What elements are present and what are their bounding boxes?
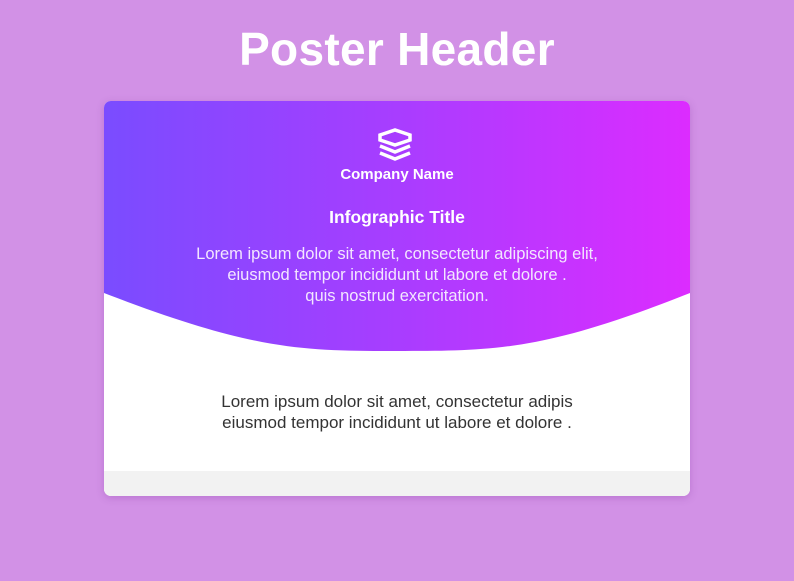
company name: Company Name <box>340 166 454 183</box>
panel: card <box>104 101 690 496</box>
body text <box>221 392 573 432</box>
title: Poster Header <box>239 23 555 75</box>
header text: eiusmod tempor incididunt ut labore et dolore . <box>227 266 567 284</box>
footer strip <box>104 471 690 496</box>
gradient header with curve <box>104 101 690 351</box>
infographic title: Infographic Title <box>329 207 465 227</box>
body text: eiusmod tempor incididunt ut labore et dolore . <box>222 413 572 432</box>
header text: quis nostrud exercitation. <box>305 287 489 305</box>
header text: Lorem ipsum dolor sit amet, consectetur adipiscing elit, <box>196 245 598 263</box>
header text <box>196 245 598 305</box>
body text: Lorem ipsum dolor sit amet, consectetur adipis <box>221 392 573 411</box>
icon: logo layers <box>378 128 412 161</box>
